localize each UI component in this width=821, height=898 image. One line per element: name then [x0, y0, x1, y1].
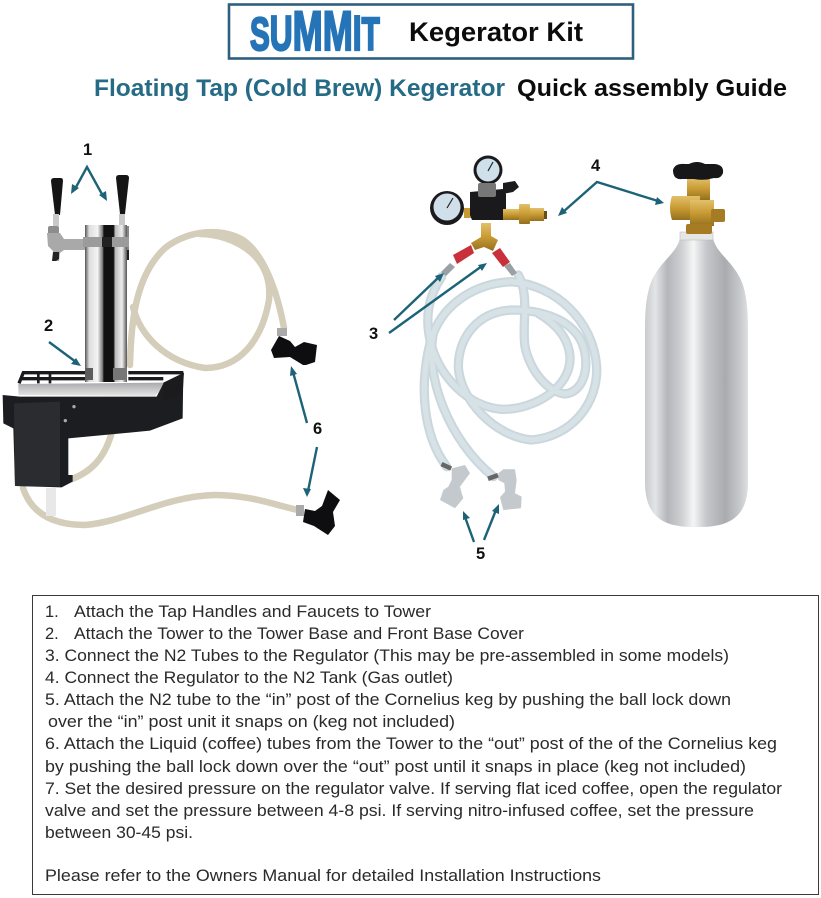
faucets	[47, 226, 129, 261]
illustration: N2 cylinder	[645, 162, 748, 527]
step 7: between 30-45 psi.	[45, 824, 193, 842]
logo: SUMMIT: SUMMIT	[250, 0, 380, 62]
number 2 and arrow	[44, 317, 81, 366]
illustration: tower and base with liquid hoses	[3, 175, 340, 535]
title: guide name: Quick assembly Guide	[517, 75, 787, 102]
top gauge	[474, 156, 502, 184]
callout arrows and numbers	[44, 141, 664, 563]
number 3 and arrows: 3	[369, 325, 378, 343]
brass outlet	[503, 204, 547, 224]
step 7: valve and set the pressure between 4-8 psi. If serving nitro-infused coffee, set the pressure	[45, 802, 754, 820]
heading: Kegerator Kit: Kegerator Kit	[409, 17, 583, 47]
step 5: over the “in” post unit it snaps on (keg not included)	[48, 713, 455, 731]
tower column	[85, 225, 127, 382]
step 4: 4. Connect the Regulator to the N2 Tank (Gas outlet)	[45, 669, 453, 687]
liquid hose lower run	[23, 432, 298, 525]
neck ring	[680, 232, 713, 240]
step 6	[45, 735, 777, 776]
instructions panel	[32, 596, 818, 894]
number 5 and arrows: 5	[476, 545, 485, 563]
illustration: regulator with gas tubes	[424, 156, 597, 510]
number 4 and arrows: 4	[591, 157, 601, 175]
black valve knob	[673, 162, 723, 180]
brass Y fitting	[471, 223, 498, 251]
step 7: 7. Set the desired pressure on the regulator valve. If serving flat iced coffee, open the regulator	[45, 780, 783, 798]
cylinder body	[645, 238, 748, 527]
number 6 and arrows	[290, 366, 322, 497]
title line	[94, 75, 787, 102]
number 1 and arrows	[71, 141, 107, 201]
base body	[3, 373, 184, 487]
brass valve	[670, 178, 725, 234]
drain tube stub	[46, 488, 56, 516]
number 6 and arrows: 6	[313, 420, 322, 438]
gas tube coils	[424, 275, 597, 477]
regulator body	[464, 181, 519, 220]
number 1 and arrows: 1	[83, 141, 92, 159]
step 7	[45, 780, 783, 842]
right ball lock	[487, 469, 522, 510]
liquid hose upper coil	[130, 232, 284, 368]
step 2: 2.	[45, 625, 59, 643]
header box: logo and kit title	[229, 0, 633, 62]
left ball lock	[440, 462, 470, 508]
step 5	[45, 691, 731, 731]
step 1: 1.	[45, 603, 59, 621]
tower collars	[83, 237, 129, 380]
step 6: by pushing the ball lock down over the “out” post until it snaps in place (keg not included)	[45, 758, 746, 776]
step 1: Attach the Tap Handles and Faucets to Tower	[74, 603, 432, 621]
lower keg coupler	[296, 490, 340, 535]
manual note: Please refer to the Owners Manual for detailed Installation Instructions	[45, 867, 601, 885]
step 6: 6. Attach the Liquid (coffee) tubes from the Tower to the “out” post of the of the Cornelius keg	[45, 735, 777, 753]
step 3: 3. Connect the N2 Tubes to the Regulator (This may be pre-assembled in some models)	[45, 647, 729, 665]
red shutoff valves	[441, 245, 517, 276]
title: product name: Floating Tap (Cold Brew) Kegerator	[94, 75, 505, 102]
left gauge	[430, 191, 464, 225]
step 5: 5. Attach the N2 tube to the “in” post of the Cornelius keg by pushing the ball lock down	[45, 691, 731, 709]
tap handles	[51, 175, 129, 226]
number 4 and arrows	[558, 157, 664, 216]
ball locks	[440, 462, 522, 510]
number 2 and arrow: 2	[44, 317, 53, 335]
upper keg coupler	[271, 328, 317, 365]
number 5 and arrows	[463, 504, 499, 563]
number 3 and arrows	[369, 263, 487, 343]
step 2: Attach the Tower to the Tower Base and Front Base Cover	[74, 625, 525, 643]
